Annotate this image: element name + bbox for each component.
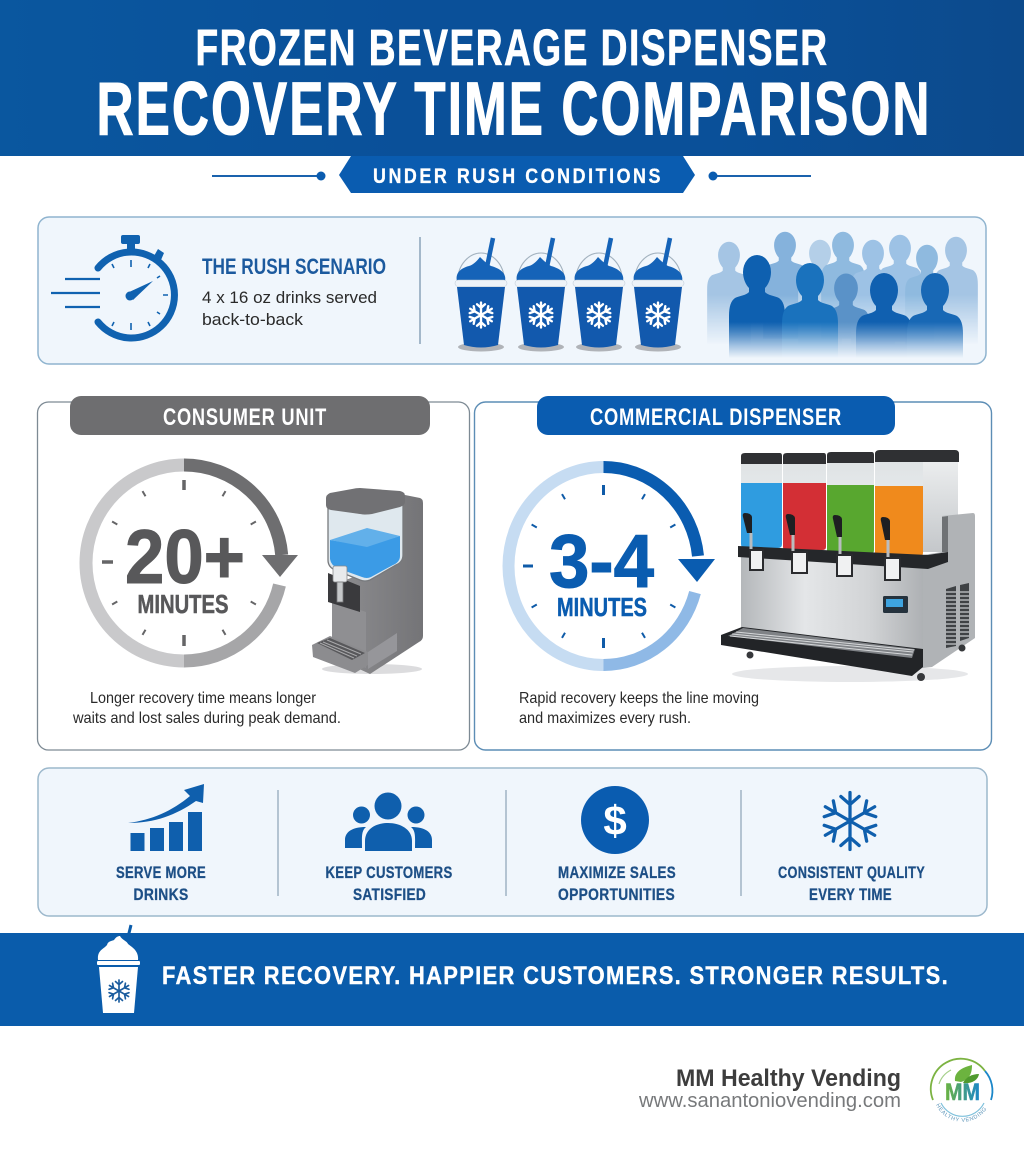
illustration: consumer slush machine bbox=[312, 488, 423, 674]
consumer caption: waits and lost sales during peak demand. bbox=[72, 710, 341, 727]
commercial caption: Rapid recovery keeps the line moving bbox=[519, 690, 759, 707]
commercial heading pill: COMMERCIAL DISPENSER bbox=[590, 404, 842, 431]
banner: tagline bbox=[0, 925, 1024, 1026]
back tank bbox=[920, 460, 958, 552]
steel body bbox=[741, 555, 923, 668]
benefit: maximize sales opportunities: OPPORTUNITIES bbox=[558, 885, 675, 904]
benefit: keep customers satisfied bbox=[326, 792, 452, 904]
benefit: keep customers satisfied: SATISFIED bbox=[353, 885, 426, 904]
icon: frozen drink cup bbox=[97, 925, 140, 1013]
illustration: commercial four-tank dispenser bbox=[721, 450, 975, 682]
footer: brand name: MM Healthy Vending bbox=[676, 1065, 901, 1092]
panel: benefits bbox=[38, 768, 987, 916]
benefit: serve more drinks: DRINKS bbox=[134, 885, 188, 904]
logo: MM Healthy Vending: MM bbox=[945, 1079, 980, 1106]
heading: the rush scenario: THE RUSH SCENARIO bbox=[202, 254, 386, 279]
benefit: consistent quality: CONSISTENT QUALITY bbox=[778, 863, 925, 882]
benefit: consistent quality bbox=[778, 792, 925, 904]
benefit: maximize sales opportunities: MAXIMIZE SALES bbox=[558, 863, 676, 882]
side housing bbox=[923, 513, 975, 668]
consumer caption bbox=[72, 690, 341, 727]
commercial heading pill bbox=[537, 396, 895, 435]
benefit: maximize sales opportunities bbox=[558, 786, 676, 904]
tank 2 bbox=[783, 463, 826, 552]
rush description bbox=[202, 288, 377, 329]
icon: four drink cups bbox=[455, 238, 684, 352]
commercial caption bbox=[519, 690, 759, 727]
commercial timer ring bbox=[509, 467, 715, 665]
rush description: 4 x 16 oz drinks served bbox=[202, 288, 377, 307]
subtitle ribbon bbox=[212, 156, 811, 193]
black manifold bar bbox=[738, 546, 948, 569]
icon: dollar coin: $ bbox=[603, 797, 627, 844]
drip tray bbox=[721, 627, 923, 676]
commercial time unit: MINUTES bbox=[557, 592, 647, 622]
icon: group of people bbox=[345, 792, 432, 851]
benefit: serve more drinks: SERVE MORE bbox=[116, 863, 206, 882]
taps bbox=[743, 513, 890, 540]
tank 1 bbox=[741, 463, 782, 549]
icon: waiting crowd bbox=[707, 232, 978, 357]
logo: MM Healthy Vending: HEALTHY VENDING bbox=[936, 1104, 986, 1122]
benefit: consistent quality: EVERY TIME bbox=[809, 885, 892, 904]
consumer caption: Longer recovery time means longer bbox=[90, 690, 317, 707]
consumer heading pill bbox=[70, 396, 430, 435]
panel: commercial dispenser bbox=[474, 396, 992, 750]
tank lids bbox=[741, 450, 959, 464]
consumer time unit: MINUTES bbox=[138, 589, 228, 619]
footer: website: www.sanantoniovending.com bbox=[638, 1090, 901, 1112]
consumer timer ring bbox=[86, 465, 298, 661]
digital display bbox=[883, 596, 908, 613]
commercial caption: and maximizes every rush. bbox=[519, 710, 691, 727]
tank 3 bbox=[827, 463, 874, 555]
logo: MM Healthy Vending bbox=[930, 1058, 994, 1122]
benefit: keep customers satisfied: KEEP CUSTOMERS bbox=[326, 863, 452, 882]
header band bbox=[0, 0, 1024, 156]
rush description: back-to-back bbox=[202, 310, 304, 329]
tank 4 bbox=[875, 462, 923, 558]
commercial time value: 3-4 bbox=[549, 519, 654, 603]
panel: rush scenario bbox=[37, 216, 987, 365]
icon: snowflake bbox=[821, 792, 879, 850]
icon: stopwatch bbox=[51, 235, 174, 338]
subtitle ribbon: UNDER RUSH CONDITIONS bbox=[373, 165, 663, 188]
icon: rising bar chart bbox=[128, 784, 204, 851]
panel: consumer unit bbox=[38, 396, 470, 750]
consumer heading pill: CONSUMER UNIT bbox=[163, 404, 327, 431]
consumer time value: 20+ bbox=[125, 515, 245, 600]
benefit: serve more drinks bbox=[116, 784, 206, 904]
